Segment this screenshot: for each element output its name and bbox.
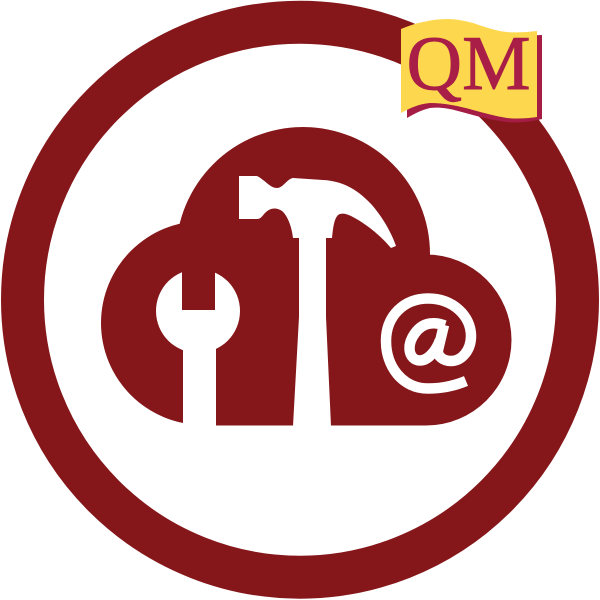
- icon: hammer: [239, 176, 396, 426]
- icon: at sign: [386, 298, 471, 388]
- flag shadow: [407, 35, 542, 122]
- QM wordmark: QM: [406, 20, 530, 106]
- flag body: [401, 19, 537, 119]
- cloud with tools: [101, 127, 512, 427]
- cloud shape: [101, 127, 512, 426]
- QM flag logo: [401, 19, 542, 122]
- icon: wrench: [156, 260, 240, 427]
